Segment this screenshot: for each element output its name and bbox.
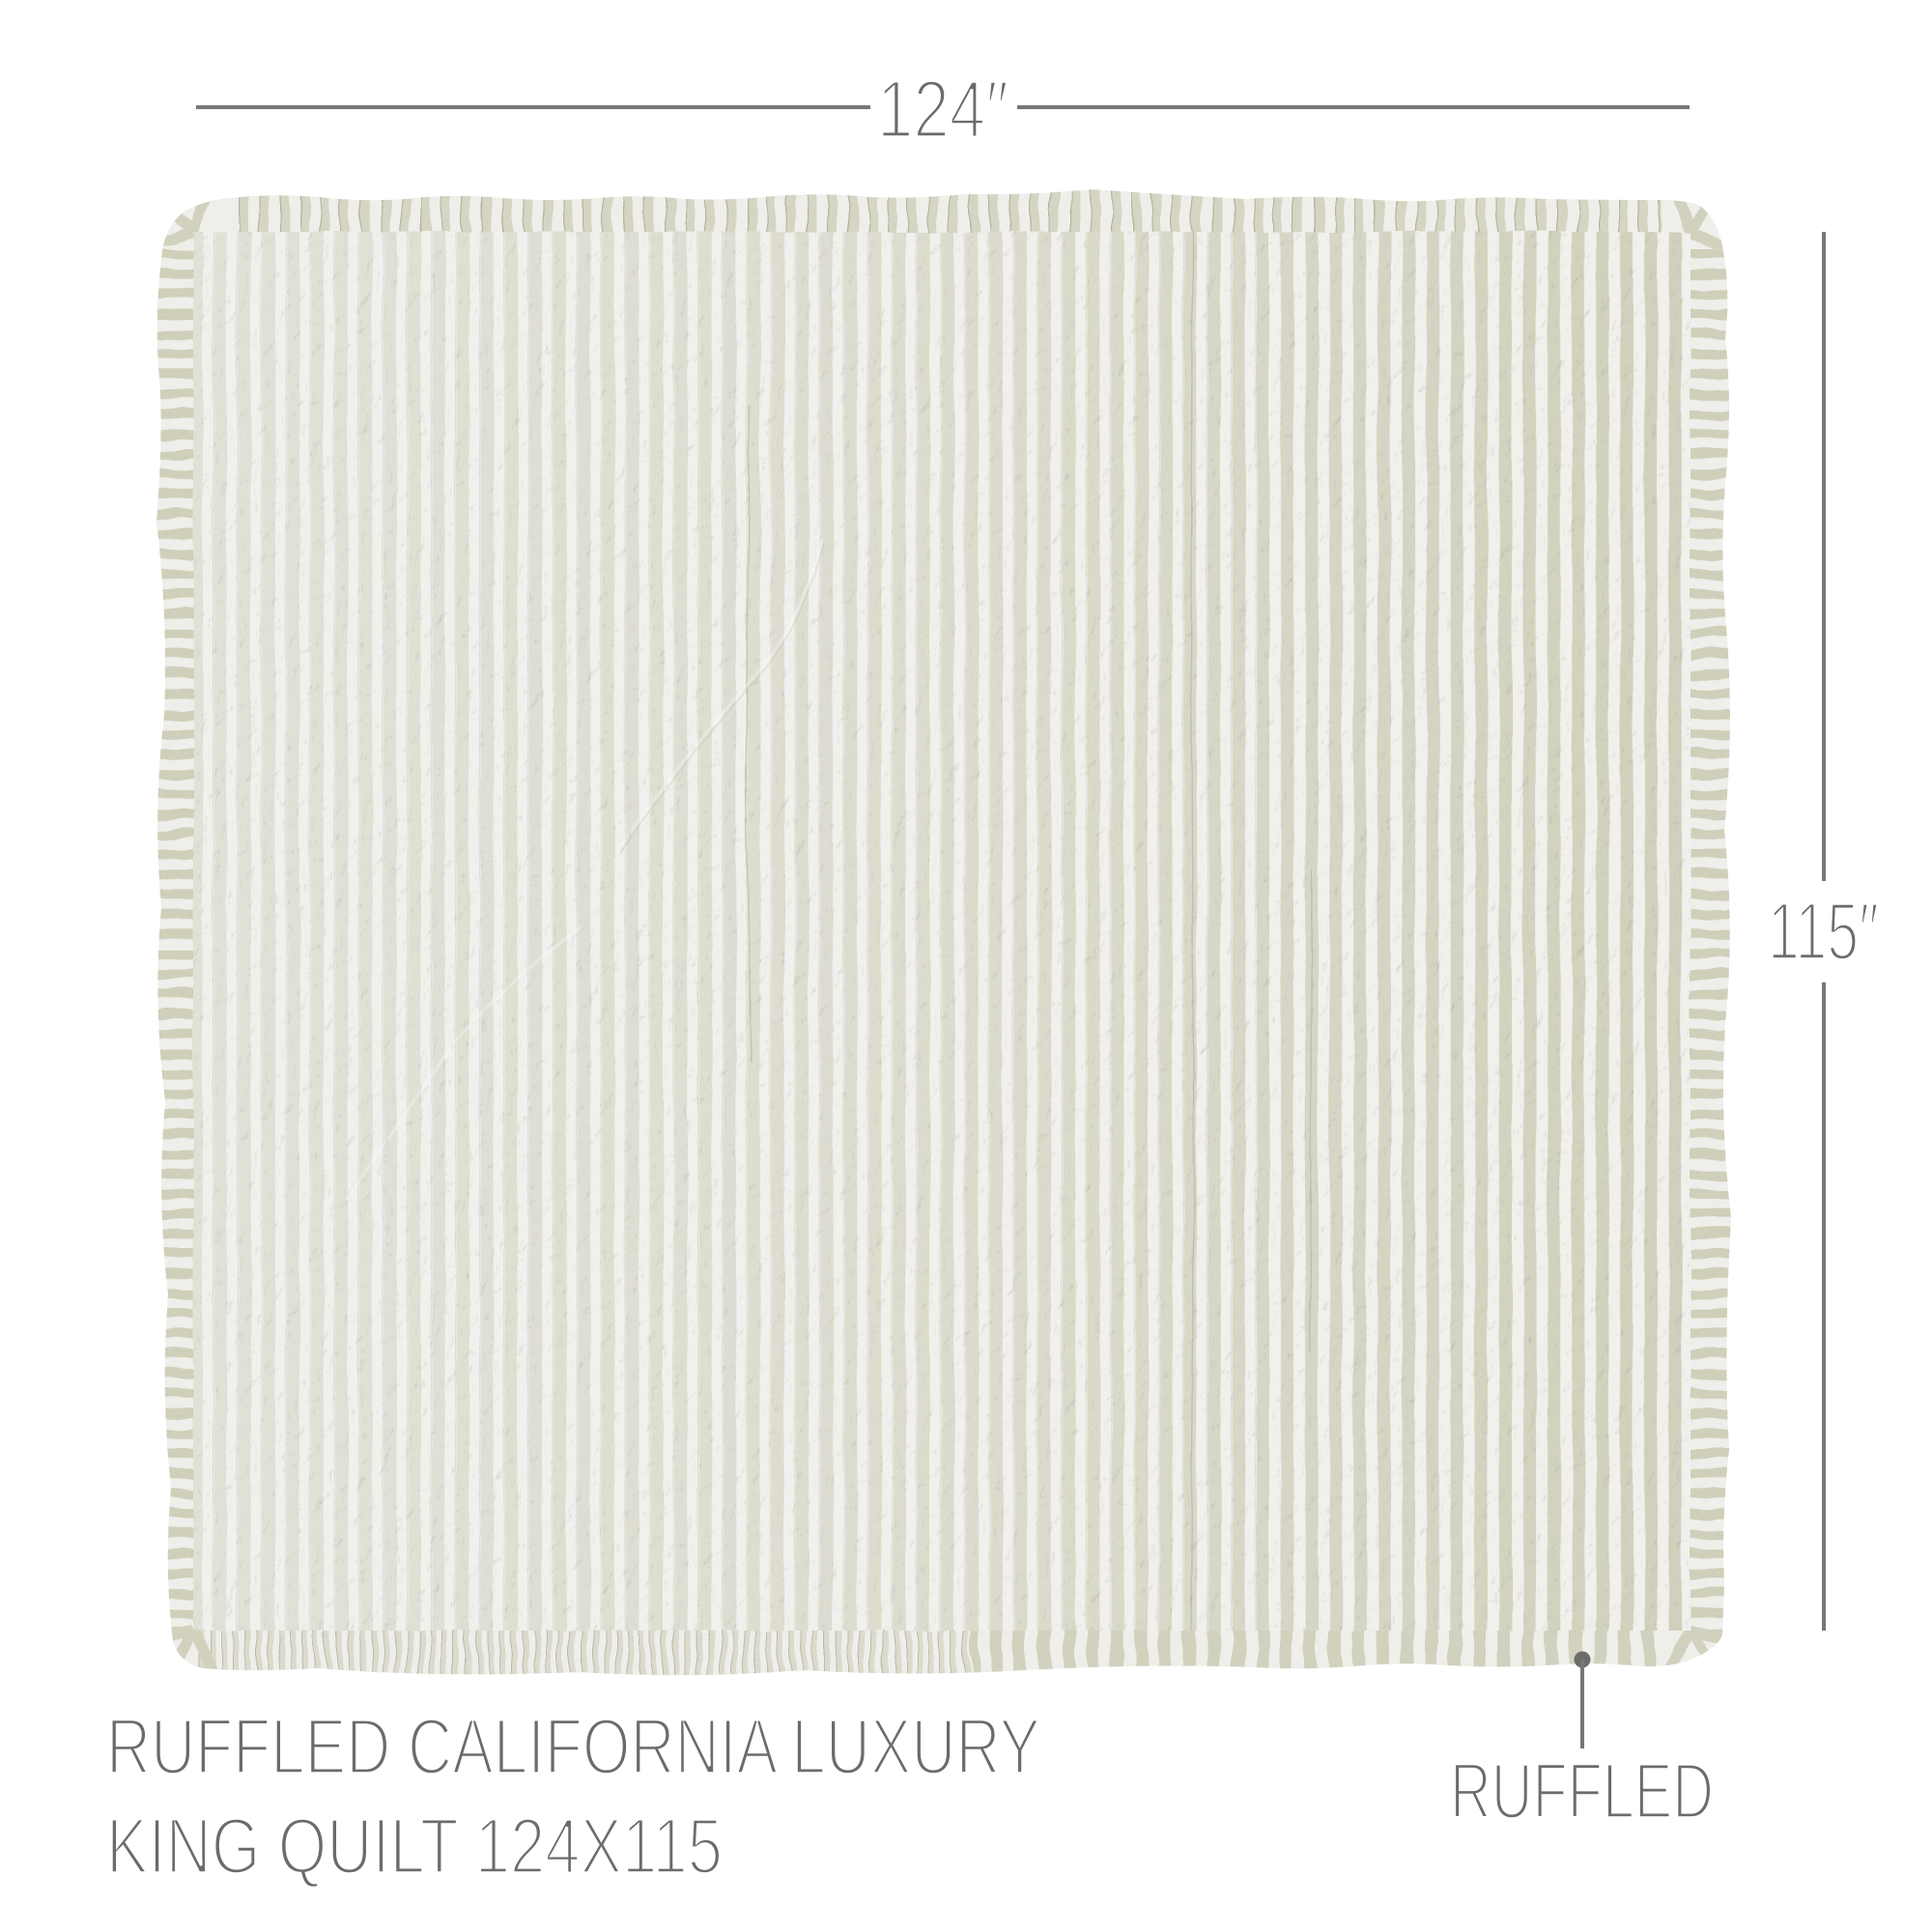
height line top (1822, 232, 1826, 881)
callout dot (1575, 1652, 1590, 1667)
ruffle: top edge (239, 189, 1662, 234)
ruffle: bottom edge left fine pleats (198, 1630, 972, 1675)
callout label: RUFFLED (1450, 1747, 1714, 1835)
height line bottom (1822, 982, 1826, 1631)
width label: 124″ (877, 64, 1009, 155)
callout leader line (1580, 1660, 1584, 1748)
dimension: height 115 inches (1768, 232, 1879, 1631)
ruffle: left edge (156, 249, 194, 1630)
quilt (135, 174, 1758, 1700)
dimension: width 124 inches (196, 64, 1690, 155)
ruffle: base fabric (135, 174, 1758, 1700)
quilt body: creases (348, 541, 823, 1198)
ruffle border (135, 174, 1758, 1700)
ruffle: bottom edge right pleats (969, 1630, 1656, 1673)
title line 2: KING QUILT 124X115 (106, 1803, 723, 1890)
quilt body (193, 232, 1690, 1631)
callout: ruffled (1450, 1652, 1714, 1835)
quilt body: panel seams (746, 232, 1312, 1631)
ruffle: right edge (1689, 249, 1731, 1633)
title line 1: RUFFLED CALIFORNIA LUXURY (106, 1703, 1040, 1791)
quilt body: white stripes (193, 232, 1690, 1631)
ruffle: corner fans (159, 188, 1734, 1681)
height label: 115″ (1768, 886, 1879, 977)
width line left (196, 105, 870, 109)
quilt body: quilting stitches (193, 232, 1256, 1631)
quilt body: left side wash (193, 232, 1256, 1631)
title (106, 1703, 1040, 1890)
quilt body: tan base (193, 232, 1690, 1631)
width line right (1017, 105, 1690, 109)
